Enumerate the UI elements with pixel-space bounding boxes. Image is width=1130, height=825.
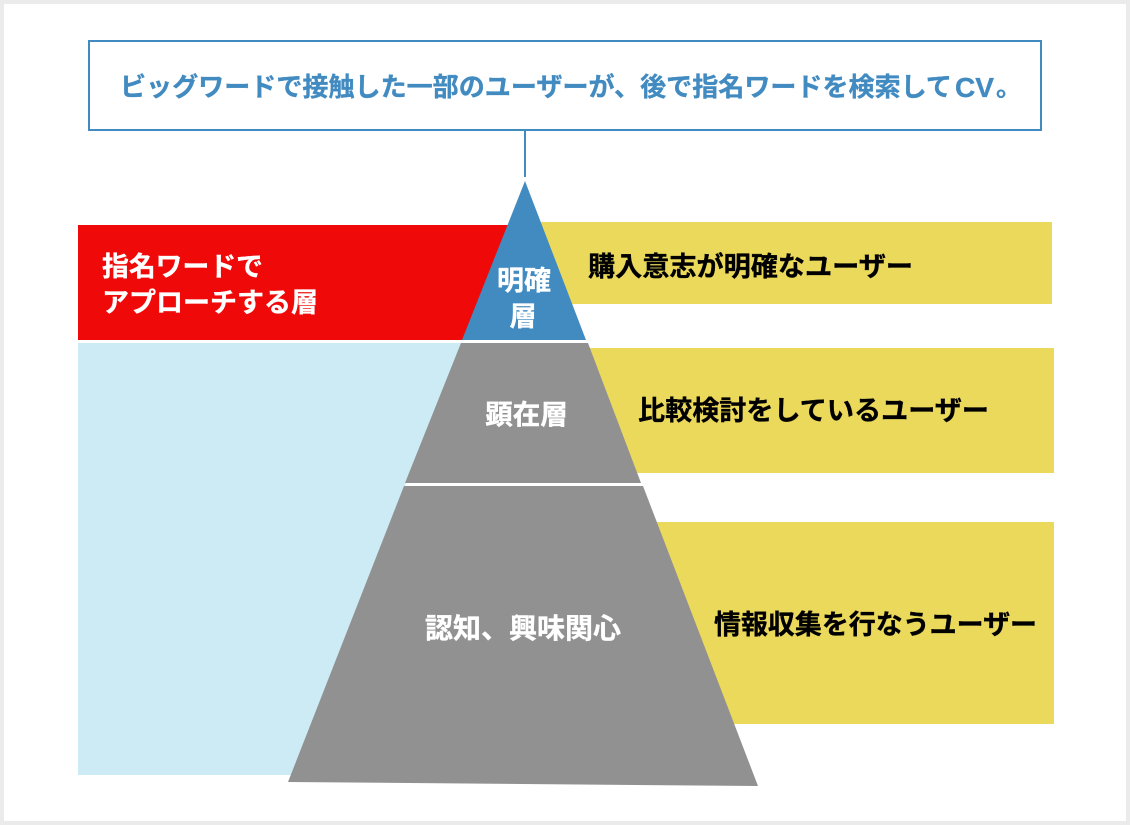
panel: comparison: 比較検討をしているユーザー	[638, 396, 989, 426]
panel: information gathering: 情報収集を行なうユーザー	[714, 610, 1037, 640]
callout: top message: ビッグワードで接触した一部のユーザーが、後で指名ワードを検索して	[120, 72, 952, 102]
connector line	[524, 131, 526, 177]
pyramid tier: awareness layer: 認知、興味関心	[425, 613, 621, 644]
panel: information gathering	[655, 522, 1054, 724]
callout: top message: 。	[996, 72, 1022, 102]
panel: named-word layer: アプローチする層	[102, 288, 318, 318]
pyramid tier: clear layer	[462, 181, 586, 340]
pyramid tier: manifest layer	[405, 343, 641, 483]
callout: top message: CV	[955, 72, 994, 103]
panel: purchase intent	[530, 222, 1052, 304]
panel: named-word layer	[78, 225, 518, 340]
pyramid tier: clear layer: 明確	[497, 266, 551, 296]
pyramid	[288, 181, 758, 786]
panel: purchase intent: 購入意志が明確なユーザー	[588, 251, 913, 282]
panel: light blue area	[78, 343, 462, 775]
panel: comparison	[588, 348, 1054, 473]
pyramid tier: clear layer: 層	[510, 302, 536, 332]
pyramid tier: manifest layer: 顕在層	[485, 399, 568, 430]
callout: top message	[89, 41, 1041, 130]
panel: named-word layer: 指名ワードで	[102, 252, 263, 282]
pyramid tier: awareness layer	[288, 486, 758, 786]
